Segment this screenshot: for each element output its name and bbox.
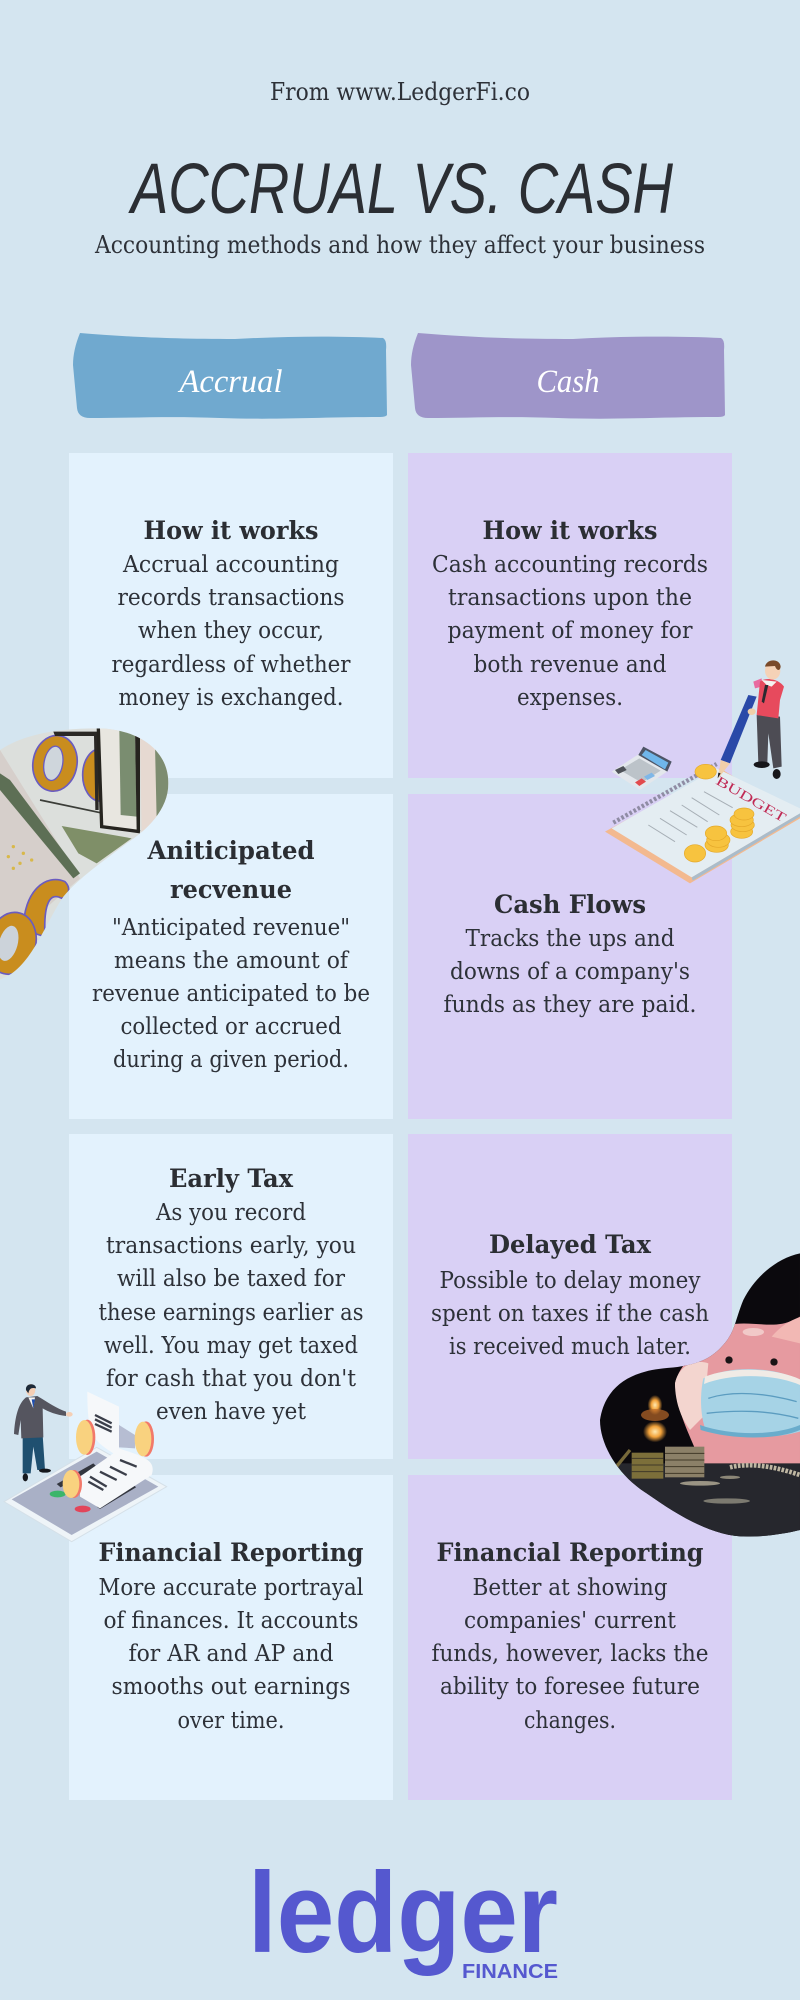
- body text: companies' current: [464, 1608, 677, 1634]
- body text: transactions upon the: [448, 585, 692, 611]
- panel: early tax: [69, 1134, 393, 1459]
- tablet: [4, 1447, 167, 1542]
- subtitle: Accounting methods and how they affect your business: [94, 231, 705, 259]
- body text: funds, however, lacks the: [432, 1641, 708, 1667]
- person with pencil: [718, 660, 784, 779]
- panel: delayed tax: Delayed Tax: [489, 1230, 652, 1259]
- panel: early tax: Early Tax: [169, 1164, 294, 1193]
- body text: for cash that you don't: [106, 1366, 357, 1392]
- businessman: [14, 1384, 73, 1481]
- body text: both revenue and: [474, 652, 667, 678]
- body text: downs of a company's: [450, 959, 690, 985]
- body text: More accurate portrayal: [98, 1575, 364, 1601]
- notebook: BUDGET: [713, 773, 789, 825]
- calculator: [612, 747, 672, 790]
- body text: of finances. It accounts: [104, 1608, 358, 1634]
- body text: Accrual accounting: [122, 552, 339, 578]
- notebook: [605, 764, 800, 883]
- panel: cash financial reporting: Financial Reporting: [436, 1538, 704, 1567]
- body text: even have yet: [156, 1399, 307, 1425]
- coins: [63, 1420, 154, 1498]
- body text: is received much later.: [449, 1334, 691, 1360]
- body text: when they occur,: [138, 618, 324, 644]
- body text: ability to foresee future: [440, 1674, 700, 1700]
- body text: [98, 1200, 364, 1425]
- illustration: budget notebook, person with pencil and calculator: [605, 660, 800, 883]
- panel: delayed tax: [408, 1134, 732, 1459]
- body text: transactions early, you: [106, 1233, 356, 1259]
- panel: accrual how it works: How it works: [144, 516, 318, 545]
- body text: regardless of whether: [112, 652, 350, 678]
- body text: [92, 915, 370, 1073]
- body text: Better at showing: [472, 1575, 668, 1601]
- source line: From www.LedgerFi.co: [270, 78, 530, 106]
- body text: during a given period.: [113, 1047, 349, 1073]
- body text: records transactions: [118, 585, 344, 611]
- image blob: piggy bank with mask: [593, 1247, 800, 1543]
- body text: expenses.: [517, 685, 623, 711]
- panel: cash flows: [408, 794, 732, 1119]
- body text: revenue anticipated to be: [92, 981, 370, 1007]
- panel: cash flows: Cash Flows: [494, 890, 646, 919]
- body text: funds as they are paid.: [444, 992, 696, 1018]
- body text: over time.: [178, 1708, 284, 1734]
- image blob: dollar bills: [0, 723, 173, 983]
- body text: will also be taxed for: [117, 1266, 345, 1292]
- body text: smooths out earnings: [112, 1674, 350, 1700]
- body text: "Anticipated revenue": [112, 915, 350, 941]
- body text: collected or accrued: [120, 1014, 342, 1040]
- logo: ledger finance: FINANCE: [462, 1961, 558, 1983]
- body text: [98, 1575, 364, 1734]
- body text: payment of money for: [448, 618, 692, 644]
- body text: well. You may get taxed: [104, 1333, 358, 1359]
- column header: Cash: Cash: [536, 364, 600, 400]
- panel: accrual how it works: [69, 453, 393, 778]
- body text: [431, 1268, 709, 1360]
- body text: [112, 552, 350, 711]
- body text: Possible to delay money: [440, 1268, 700, 1294]
- panel: accrual financial reporting: Financial Reporting: [98, 1538, 364, 1567]
- panel: accrual financial reporting: [69, 1475, 393, 1800]
- receipt: [80, 1392, 153, 1508]
- column header: Accrual: Accrual: [178, 364, 282, 400]
- body text: money is exchanged.: [118, 685, 344, 711]
- body text: for AR and AP and: [128, 1641, 334, 1667]
- body text: [444, 926, 696, 1018]
- heading: recvenue: [170, 875, 292, 904]
- panel: cash how it works: [408, 453, 732, 778]
- column header: Cash: [411, 333, 725, 419]
- panel: anticipated revenue: [69, 794, 393, 1119]
- heading: Aniticipated: [147, 836, 314, 865]
- body text: [432, 1575, 708, 1734]
- title: ACCRUAL VS. CASH: [128, 149, 674, 229]
- body text: spent on taxes if the cash: [431, 1301, 709, 1327]
- body text: Tracks the ups and: [466, 926, 675, 952]
- panel: cash how it works: How it works: [482, 516, 658, 545]
- body text: [432, 552, 708, 711]
- body text: these earnings earlier as: [98, 1300, 364, 1326]
- logo: ledger finance: ledger: [248, 1850, 558, 1977]
- body text: Cash accounting records: [432, 552, 708, 578]
- body text: changes.: [524, 1708, 616, 1734]
- body text: As you record: [155, 1200, 306, 1226]
- illustration: tablet, receipt, coins and businessman: [4, 1384, 167, 1542]
- column header: Accrual: [73, 333, 387, 419]
- panel: cash financial reporting: [408, 1475, 732, 1800]
- body text: means the amount of: [114, 948, 349, 974]
- heading: [147, 836, 314, 904]
